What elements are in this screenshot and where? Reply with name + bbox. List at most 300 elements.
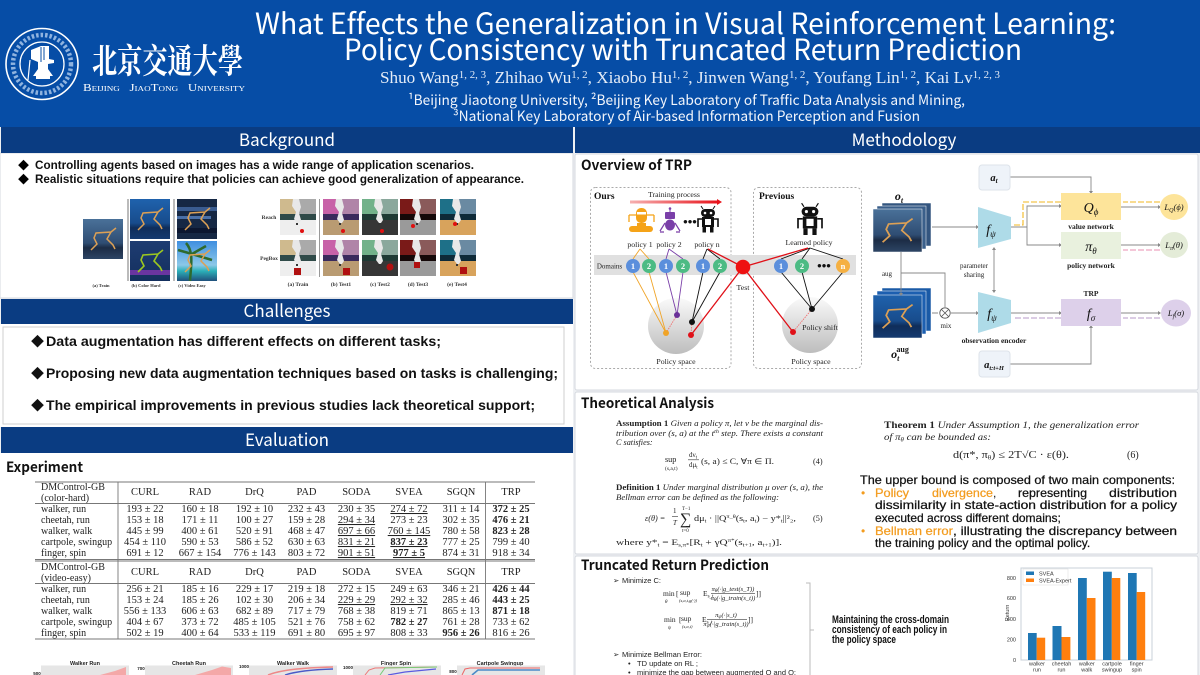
value network: ϕ xyxy=(1094,207,1099,217)
table rows: color-hard: PAD xyxy=(296,487,317,498)
minimize C: min xyxy=(664,615,676,624)
table rows: color-hard: DMControl-GB xyxy=(41,482,105,493)
policy network: θ xyxy=(1092,246,1097,256)
icon: black robot n xyxy=(698,206,718,232)
loss L_pi: (θ) xyxy=(1173,240,1183,250)
upper bound text: executed across different domains; xyxy=(875,511,1061,525)
authors: , Zhihao Wu xyxy=(486,68,571,87)
figure: robot manipulation samples xyxy=(260,199,476,288)
assumption 1: th xyxy=(714,429,719,435)
upper bound text: • xyxy=(861,524,865,538)
value network: Q xyxy=(1084,201,1094,216)
scene captions: (c) Test2 xyxy=(370,281,390,288)
table rows: video-easy: RAD xyxy=(189,567,212,578)
heading: overview: Overview of TRP xyxy=(581,155,692,175)
axis labels: 600 xyxy=(1007,596,1016,602)
table rows: color-hard: 823 ± 28 xyxy=(492,526,530,537)
table rows: video-easy: 733 ± 62 xyxy=(492,617,530,628)
figure: robot manipulation samples: Reach xyxy=(262,215,276,221)
sphere labels xyxy=(656,323,839,366)
table rows: video-easy: 229 ± 29 xyxy=(338,595,375,606)
table rows: video-easy: 768 ± 38 xyxy=(338,606,375,617)
table rows: video-easy: CURL xyxy=(131,567,159,578)
axis labels: walker xyxy=(1028,662,1045,668)
table rows: video-easy: 502 ± 19 xyxy=(126,628,164,639)
icon: black robot learned xyxy=(798,203,822,235)
bar chart xyxy=(1005,568,1152,674)
table rows: color-hard: 193 ± 22 xyxy=(126,504,164,515)
minimize C: ψ xyxy=(668,626,672,631)
challenge list: Proposing new data augmentation techniques based on tasks is challenging; xyxy=(46,365,558,381)
table rows: color-hard: 274 ± 72 xyxy=(390,504,428,515)
table rows: color-hard: 311 ± 14 xyxy=(443,504,480,515)
chart: finger spin: Finger Spin xyxy=(381,661,412,667)
observation stack: o xyxy=(895,189,901,203)
table rows: color-hard: SGQN xyxy=(447,487,476,498)
minimize C: π xyxy=(715,612,718,619)
bullet list: Realistic situations require that policies can achieve good generalization of appearance. xyxy=(35,174,524,186)
axis labels: Return xyxy=(1005,605,1011,621)
table rows: video-easy: 256 ± 21 xyxy=(126,584,164,595)
table rows: video-easy: 819 ± 71 xyxy=(390,606,428,617)
chart: cartpole swingup: 800 xyxy=(449,669,457,674)
domain circles: 2 xyxy=(681,261,685,271)
definition 1: π* xyxy=(728,539,735,544)
diagram: policy space comparison xyxy=(590,188,862,368)
minimize C: θ xyxy=(715,589,718,594)
augmented observation stack: aug xyxy=(896,345,909,354)
table rows: color-hard: 230 ± 35 xyxy=(338,504,375,515)
definition 1: (5) xyxy=(813,514,823,523)
table rows: video-easy: 956 ± 26 xyxy=(442,628,480,639)
minimize C: s_t xyxy=(708,594,714,600)
definition 1: Definition 1 Under marginal distribution μ over (s, a), the xyxy=(616,483,823,492)
test domain node: Test xyxy=(737,283,750,292)
policy network: π xyxy=(1085,240,1092,255)
minimize C: (s,a,t) xyxy=(682,624,693,630)
table rows: video-easy: 816 ± 26 xyxy=(492,628,530,639)
minimize C: Minimize C: xyxy=(622,576,661,585)
observation stack xyxy=(873,189,931,252)
minimize C: (·|g_train(s_t)) xyxy=(710,621,749,628)
minimize C: E xyxy=(703,589,708,598)
table rows: video-easy: 717 ± 79 xyxy=(288,606,325,617)
legend: SVEA-Expert xyxy=(1039,578,1072,584)
definition 1: ε(θ) = xyxy=(645,514,665,523)
axis labels: swingup xyxy=(1102,668,1122,674)
policy network: policy network xyxy=(1067,261,1116,270)
challenge list: ◆ xyxy=(31,366,44,381)
assumption 1: dμ xyxy=(689,461,696,469)
table rows: video-easy: walker, walk xyxy=(41,606,92,617)
upper bound text: , illustrating the discrepancy between xyxy=(953,524,1177,538)
axis labels: 800 xyxy=(1007,576,1016,582)
minimize bellman error: • xyxy=(628,659,631,668)
definition 1: , a xyxy=(752,538,763,547)
caption: video easy: (c) Video Easy xyxy=(178,283,206,288)
table rows: video-easy: 292 ± 32 xyxy=(390,595,428,606)
policy labels xyxy=(597,238,833,270)
chart: walker run: Walker Run xyxy=(70,661,101,667)
action input a_t:t+H xyxy=(979,351,1010,377)
upper bound text: Bellman error xyxy=(875,524,953,538)
challenge list xyxy=(31,333,558,413)
authors: , Kai Lv xyxy=(916,68,973,87)
definition 1: [R xyxy=(689,538,701,547)
title: Policy Consistency with Truncated Return Prediction xyxy=(344,27,1022,69)
bars: SVEA-Expert xyxy=(1037,578,1145,660)
minimize C: π xyxy=(703,621,707,628)
definition 1: ) − y* xyxy=(756,514,781,523)
scene captions: (e) Test4 xyxy=(447,281,467,288)
consistency note: the policy space xyxy=(832,634,896,646)
definition 1: = E xyxy=(659,538,678,547)
logo: university name in English: Beijing JiaoTong University xyxy=(83,83,245,94)
chart: walker walk: Walker Walk xyxy=(277,661,310,667)
mix operator: mix xyxy=(941,322,952,330)
table rows: color-hard: cheetah, run xyxy=(41,515,90,526)
chart: walker walk: 1000 xyxy=(239,664,250,669)
table rows: color-hard: 918 ± 34 xyxy=(492,548,530,559)
definition 1: t+1 xyxy=(763,544,772,548)
chart: cartpole swingup: Cartpole Swingup xyxy=(477,661,524,667)
table rows: color-hard: 400 ± 61 xyxy=(181,526,219,537)
labels: sharing xyxy=(964,271,985,279)
encoder top xyxy=(978,207,1011,248)
minimize bellman error xyxy=(613,650,796,675)
challenge list: ◆ xyxy=(31,398,44,413)
minimize C: ]] xyxy=(748,615,753,624)
loss L_f: (σ) xyxy=(1174,308,1184,318)
augmented observation stack xyxy=(873,288,931,363)
logo: university seal xyxy=(6,28,78,100)
action input a_t: t xyxy=(996,177,999,185)
assumption 1: step. There exists a constant xyxy=(719,429,824,438)
table rows: color-hard: TRP xyxy=(501,487,521,498)
TRP predictor: σ xyxy=(1091,313,1096,323)
domain circles: 1 xyxy=(664,261,668,271)
table rows: color-hard: 760 ± 145 xyxy=(388,526,430,537)
panel: challenges xyxy=(0,297,573,427)
table rows: video-easy: 206 ± 34 xyxy=(288,595,326,606)
table rows: video-easy: 521 ± 76 xyxy=(288,617,325,628)
table rows: video-easy: (video-easy) xyxy=(41,573,91,584)
domain circles: 1 xyxy=(631,261,635,271)
panel: background xyxy=(0,126,573,298)
definition 1: ||²₂, xyxy=(783,514,796,523)
table rows: video-easy: 443 ± 25 xyxy=(492,595,530,606)
loss L_f: f xyxy=(1173,313,1176,320)
theorem 1: ) ≤ 2T√C · ε(θ). xyxy=(991,450,1069,461)
labels: aug xyxy=(882,270,893,278)
table rows: video-easy: 249 ± 63 xyxy=(390,584,428,595)
authors: , Jinwen Wang xyxy=(688,68,789,87)
theorem 1: of π xyxy=(884,433,899,443)
table rows: video-easy: 865 ± 13 xyxy=(442,606,480,617)
minimize C: sup xyxy=(681,614,692,623)
upper bound text: dissimilarity in state-action distribution for a policy xyxy=(875,498,1177,512)
table rows: color-hard: 445 ± 99 xyxy=(126,526,164,537)
TRP predictor: TRP xyxy=(1084,289,1099,298)
domain circles: 2 xyxy=(647,261,651,271)
chart: cartpole swingup xyxy=(449,661,545,675)
table rows: color-hard: 273 ± 23 xyxy=(390,515,428,526)
assumption 1: t xyxy=(696,456,698,460)
authors: 1, 2, 3 xyxy=(459,70,486,81)
axis labels: walk xyxy=(1080,668,1093,674)
affiliations: ³National Key Laboratory of Air-based Information Perception and Fusion xyxy=(453,106,920,126)
table rows: video-easy: 682 ± 89 xyxy=(236,606,273,617)
definition 1: t xyxy=(743,520,746,524)
minimize C xyxy=(613,576,761,631)
table rows: color-hard: SVEA xyxy=(395,487,423,498)
legend: SVEA xyxy=(1039,572,1054,578)
table rows: color-hard: cartpole, swingup xyxy=(41,537,112,548)
axis labels: 200 xyxy=(1007,638,1016,644)
affiliations: ¹Beijing Jiaotong University, ²Beijing Key Laboratory of Traffic Data Analysis and Mining, xyxy=(408,90,965,110)
title: What Effects the Generalization in Visual Reinforcement Learning: xyxy=(255,1,1116,43)
authors: 1, 2 xyxy=(900,70,916,81)
scene captions: (d) Test3 xyxy=(408,281,428,288)
definition 1: (s xyxy=(736,514,743,523)
assumption 1: (s,a,t) xyxy=(665,465,678,472)
icon: purple robot xyxy=(660,207,680,232)
definition 1: , a xyxy=(745,514,755,523)
policy points xyxy=(663,306,815,338)
table rows: video-easy: 758 ± 62 xyxy=(338,617,375,628)
minimize C: θ xyxy=(714,598,717,603)
table rows: color-hard xyxy=(41,482,530,559)
chart: cheetah run: Cheetah Run xyxy=(172,661,207,667)
figure: robot manipulation samples: PegBox xyxy=(260,256,278,262)
table rows: video-easy: PAD xyxy=(296,567,317,578)
upper bound text: divergence xyxy=(932,486,993,500)
policy network xyxy=(1061,232,1121,270)
minimize C: π xyxy=(711,595,714,602)
caption: color hard: (b) Color Hard xyxy=(132,283,161,288)
policy space spheres xyxy=(648,297,838,354)
theorem 1: θ xyxy=(988,456,991,462)
panel: methodology xyxy=(575,126,1200,675)
scene captions xyxy=(288,281,467,288)
table rows: color-hard: 837 ± 23 xyxy=(390,537,428,548)
loss L_Q xyxy=(1160,194,1188,220)
table rows: video-easy: cheetah, run xyxy=(41,595,90,606)
table rows: video-easy: DMControl-GB xyxy=(41,562,105,573)
minimize C: ➢ xyxy=(613,576,620,585)
table rows: video-easy: 782 ± 27 xyxy=(390,617,428,628)
table rows: video-easy: SGQN xyxy=(447,567,476,578)
authors: 1, 2 xyxy=(571,70,588,81)
challenge list: The empirical improvements in previous studies lack theoretical support; xyxy=(46,397,535,413)
definition 1: 1 xyxy=(673,507,677,515)
table rows: video-easy: 556 ± 133 xyxy=(124,606,166,617)
upper bound text xyxy=(860,473,1177,550)
definition 1: t+1 xyxy=(743,544,753,548)
axis labels: cartpole xyxy=(1102,662,1122,668)
table rows: color-hard: 302 ± 35 xyxy=(442,515,480,526)
policy labels: Learned policy xyxy=(786,238,833,247)
definition 1: t=0 xyxy=(682,529,689,534)
minimize C: [ xyxy=(679,615,682,624)
title xyxy=(255,1,1116,69)
loss L_Q: (ϕ) xyxy=(1174,202,1184,212)
table rows: color-hard: (color-hard) xyxy=(41,493,89,504)
results table xyxy=(35,482,535,639)
test domain node xyxy=(736,260,750,292)
table rows: video-easy: 808 ± 33 xyxy=(390,628,428,639)
assumption 1: (4) xyxy=(813,457,823,466)
definition 1: ∑ xyxy=(680,511,691,528)
table rows: color-hard: walker, walk xyxy=(41,526,92,537)
training process arrow: Training process xyxy=(648,190,700,199)
table rows: video-easy: DrQ xyxy=(245,567,264,578)
minimize C: E xyxy=(702,615,707,624)
loss L_Q: Q xyxy=(1169,208,1174,214)
table rows: color-hard: 831 ± 21 xyxy=(338,537,375,548)
policy labels: policy n xyxy=(694,240,720,249)
connectors xyxy=(899,177,1161,364)
definition 1: Bellman error can be defined as the following: xyxy=(616,493,779,502)
table rows: color-hard: RAD xyxy=(189,487,212,498)
chart: finger spin xyxy=(343,661,441,675)
theorem 1: (6) xyxy=(1127,450,1139,461)
theorem 1: θ xyxy=(901,438,904,444)
table rows: color-hard: 667 ± 154 xyxy=(179,548,222,559)
table rows: video-easy: 871 ± 18 xyxy=(492,606,530,617)
table rows: video-easy: 691 ± 80 xyxy=(288,628,325,639)
table rows: color-hard: SODA xyxy=(342,487,371,498)
bullet list: ◆ xyxy=(18,173,29,186)
table rows: color-hard: 232 ± 43 xyxy=(288,504,325,515)
table rows: video-easy: walker, run xyxy=(41,584,86,595)
mix operator xyxy=(940,308,952,330)
panel: theoretical analysis xyxy=(575,392,1198,554)
axis labels: finger xyxy=(1130,662,1144,668)
heading: background: Background xyxy=(239,126,335,151)
sub-heading: experiment: Experiment xyxy=(6,457,83,477)
definition 1: T xyxy=(673,519,678,527)
authors: 1, 2, 3 xyxy=(973,70,1000,81)
table rows: color-hard: 153 ± 18 xyxy=(126,515,164,526)
chart: cheetah run xyxy=(137,661,233,675)
minimize C: ψ xyxy=(718,615,722,620)
legend xyxy=(1023,569,1072,585)
heading: challenges xyxy=(1,297,573,324)
heading: truncated return prediction: Truncated Return Prediction xyxy=(581,555,769,575)
training process arrow xyxy=(630,190,722,205)
table rows: color-hard: 977 ± 5 xyxy=(393,548,425,559)
definition 1: · ||Q xyxy=(706,514,727,523)
table rows: video-easy: 404 ± 67 xyxy=(126,617,164,628)
minimize C: (·|g_train(s_t)) xyxy=(716,595,755,602)
bars: SVEA xyxy=(1028,572,1137,660)
policy labels: Domains xyxy=(597,262,622,270)
definition 1: t xyxy=(701,544,703,548)
loss gradient arrows xyxy=(1013,202,1160,318)
table rows: color-hard: 520 ± 91 xyxy=(236,526,273,537)
scene captions: (a) Train xyxy=(288,281,308,288)
definition 1: dμ xyxy=(694,514,702,523)
axis labels xyxy=(1005,576,1144,674)
minimize C: (s,a,t,g(·)) xyxy=(679,598,697,604)
loss L_f: L xyxy=(1168,308,1173,318)
heading: challenges: Challenges xyxy=(244,297,330,322)
scene columns xyxy=(280,199,476,276)
authors: , Youfang Lin xyxy=(805,68,900,87)
table rows: color-hard: 776 ± 143 xyxy=(233,548,276,559)
table rows: color-hard: 192 ± 10 xyxy=(236,504,273,515)
table rows: video-easy: 185 ± 16 xyxy=(181,584,219,595)
table rows: color-hard: 100 ± 27 xyxy=(236,515,273,526)
table rows: video-easy: TRP xyxy=(501,567,521,578)
augmented observation stack: t xyxy=(897,354,900,363)
axis labels: spin xyxy=(1132,668,1142,674)
upper bound text: The upper bound is composed of two main components: xyxy=(860,473,1175,487)
minimize bellman error: Minimize Bellman Error: xyxy=(622,650,702,659)
minimize C: [ xyxy=(676,589,679,598)
table rows: video-easy: 346 ± 21 xyxy=(442,584,480,595)
domain circles xyxy=(626,258,850,273)
table rows: video-easy: SODA xyxy=(342,567,371,578)
minimize C: ]] xyxy=(756,589,761,598)
labels: parameter xyxy=(960,262,989,270)
table rows: video-easy: 185 ± 26 xyxy=(181,595,219,606)
bullet list: ◆ xyxy=(18,159,29,172)
minimize C: π xyxy=(712,586,715,593)
sphere labels: Policy shift xyxy=(802,323,839,332)
domain circles: ••• xyxy=(817,258,831,273)
challenge list: ◆ xyxy=(31,334,44,349)
theorem 1 xyxy=(884,421,1139,462)
table rows: color-hard: 372 ± 25 xyxy=(492,504,530,515)
loss L_Q: L xyxy=(1164,202,1169,212)
table rows: color-hard: 777 ± 25 xyxy=(442,537,480,548)
panel: evaluation xyxy=(0,426,573,675)
table rows: video-easy: 153 ± 24 xyxy=(126,595,164,606)
upper bound text: distribution xyxy=(1109,486,1177,500)
theorem 1: Theorem 1 Under Assumption 1, the generalization error xyxy=(884,421,1139,431)
table rows: video-easy: 219 ± 18 xyxy=(288,584,325,595)
table rows: video-easy: 272 ± 15 xyxy=(338,584,375,595)
action input a_t xyxy=(979,165,1010,190)
loss L_pi: L xyxy=(1165,240,1170,250)
definition 1 xyxy=(616,483,823,548)
labels xyxy=(882,262,1027,345)
upper bound text: , xyxy=(993,486,996,500)
authors: Shuo Wang xyxy=(380,68,456,87)
chart: walker walk xyxy=(239,661,337,675)
chart: walker run xyxy=(33,661,129,675)
definition 1: + γQ xyxy=(703,538,728,547)
table rows: video-easy: 400 ± 64 xyxy=(181,628,219,639)
axis labels: 400 xyxy=(1007,617,1016,623)
table rows: video-easy: 485 ± 105 xyxy=(233,617,276,628)
definition 1: T−1 xyxy=(682,507,691,512)
action input a_t:t+H: t:t+H xyxy=(989,365,1005,372)
value network xyxy=(1061,193,1121,231)
upper bound text: Policy xyxy=(875,486,909,500)
table rows: video-easy: SVEA xyxy=(395,567,423,578)
caption: train: (a) Train xyxy=(93,283,110,288)
encoder top: f xyxy=(986,223,990,238)
table rows: video-easy: 606 ± 63 xyxy=(181,606,219,617)
consistency note: Maintaining the cross-domain xyxy=(832,614,949,626)
encoder bottom: ψ xyxy=(991,313,997,323)
heading: background xyxy=(1,126,573,153)
table rows: video-easy: 285 ± 46 xyxy=(442,595,480,606)
table rows: color-hard: 697 ± 66 xyxy=(338,526,375,537)
